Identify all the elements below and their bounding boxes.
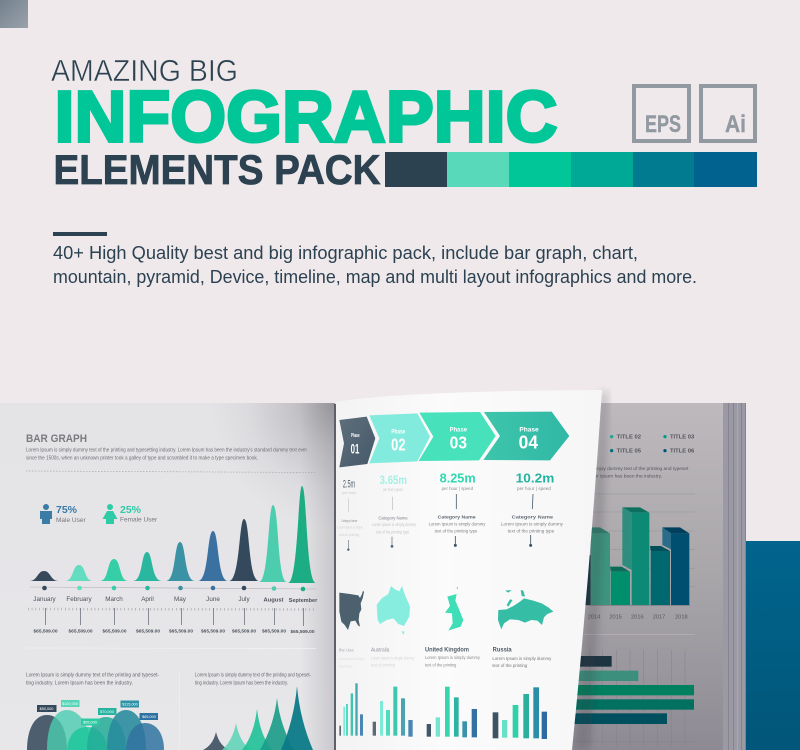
bar chart group 2 (373, 687, 413, 737)
value labels: $65,509.00 (68, 628, 93, 634)
phase arrow 02 (369, 413, 430, 463)
stat column 01: text of printing (339, 533, 359, 537)
country labels: Lorem Ipsum is simply (339, 656, 364, 661)
stat column 02: Lorem Ipsum is simply dummy (372, 522, 417, 527)
icon: Ai file badge (701, 86, 755, 141)
stat column 03: Category Name (438, 514, 476, 520)
month labels: January (33, 596, 57, 603)
map: Australia (377, 586, 410, 635)
phase arrow 03: 03 (450, 432, 467, 452)
dome tags: $115,000 (122, 702, 138, 706)
country labels: Australia (371, 647, 390, 653)
icon: EPS file badge (634, 86, 689, 141)
country labels: text of the printing (425, 662, 457, 667)
phase arrow 03: Phase (450, 427, 467, 434)
colour swatch strip (385, 152, 757, 187)
page shadow (574, 392, 608, 750)
stat: female user: Female User (120, 516, 158, 524)
book mockup (0, 390, 746, 750)
corner square (0, 0, 28, 28)
chart year labels: 2015 (609, 614, 622, 620)
chart: overlapping domes (27, 700, 164, 750)
3D bar chart (580, 507, 690, 605)
intro text (26, 448, 307, 462)
chart: peaks (203, 686, 313, 750)
accent rule (53, 232, 107, 236)
chart year labels: 2018 (675, 614, 688, 620)
phase arrow 01 (339, 417, 375, 467)
value labels: $65,509.00 (201, 628, 225, 634)
value labels: $65,509.00 (102, 628, 127, 634)
value drop lines (46, 608, 304, 626)
stat column 03: per hour | speed (442, 486, 474, 491)
stat column 04: Lorem Ipsum is simply dummy (501, 522, 564, 527)
right page text: enjoy dummy text of the printing and typeset (594, 466, 689, 471)
icon: female (102, 504, 118, 524)
dome tags: $70,000 (100, 710, 114, 714)
stat column 04: Category Name (512, 514, 553, 520)
stat column 04: per hour | speed (517, 486, 552, 491)
country labels: Lorem Ipsum is simply dummy (425, 655, 481, 660)
right page text: or Ipsum has been the industry. (594, 474, 662, 479)
value labels: $65,509.00 (262, 628, 286, 634)
icon: EPS file badge: EPS (645, 111, 681, 138)
title: infographic: INFOGRAPHIC (54, 78, 558, 158)
stat column 01 (337, 478, 363, 551)
stat: male user (40, 504, 86, 524)
phase arrow 04 (483, 412, 569, 460)
dome tags: $100,000 (62, 702, 78, 706)
month labels: April (141, 596, 154, 603)
bar chart group 4 (493, 687, 547, 739)
legend (610, 435, 695, 455)
page stack edge (723, 403, 746, 750)
value labels: $65,509.00 (169, 628, 193, 634)
title: amazing big: AMAZING BIG (51, 54, 238, 88)
timeline dots (42, 586, 305, 591)
bottom text blocks: Lorem Ipsum is simply dummy text of the printing and typeset- (26, 672, 159, 678)
icon: male (40, 504, 52, 524)
heading: bar graph: BAR GRAPH (26, 433, 87, 445)
month labels: August (264, 598, 284, 604)
stat: female user: 25% (120, 504, 142, 516)
value labels: $65,509.00 (232, 628, 256, 634)
stat column 01: 2.5m (343, 478, 355, 490)
country labels: Russia (493, 646, 512, 653)
stat column 02: Category Name (378, 515, 408, 520)
month labels: February (66, 596, 92, 603)
value labels (33, 628, 315, 635)
bottom text blocks: Lorem Ipsum is simply dummy text of the printing and typeset- (195, 672, 311, 678)
title: elements pack: ELEMENTS PACK (54, 146, 380, 193)
bottom text blocks (26, 672, 311, 686)
stat column 03: Lorem Ipsum is simply dummy (429, 522, 486, 527)
month labels: March (105, 596, 123, 603)
stat column 02: per hour | speed (383, 487, 403, 492)
phase arrow 01: Phase (351, 433, 360, 439)
map: United Kingdom (445, 587, 463, 631)
stat column 01: Lorem Ipsum is simply (337, 525, 363, 529)
icon: Ai file badge: Ai (725, 111, 746, 138)
country labels: United Kingdom (425, 646, 469, 653)
month labels: September (289, 598, 318, 604)
stat column 03: 8.25m (440, 472, 476, 486)
map: USA (339, 591, 364, 630)
bottom text blocks: ting industry. Lorem Ipsum has been the industry. (26, 680, 133, 686)
chart year labels: 2017 (653, 614, 665, 620)
bottom text blocks: ting industry. Lorem Ipsum has been the industry. (195, 680, 288, 686)
country labels: text of the printing (492, 663, 528, 668)
stat column 03: text of the printing type (435, 529, 478, 534)
bar chart group 1 (339, 683, 363, 736)
legend: TITLE 03 (670, 435, 695, 441)
intro text: since the 1500s, when an unknown printer took a galley of type and scrambled it to make a type specimen book. (26, 456, 258, 462)
panel: centre curled page (336, 390, 602, 750)
legend: TITLE 06 (670, 449, 695, 455)
stat column 02 (372, 473, 417, 548)
panel: right page with 3D bar chart (553, 403, 746, 750)
stat: male user: 75% (56, 504, 78, 516)
description text: mountain, pyramid, Device, timeline, map and multi layout infographics and more. (53, 267, 697, 287)
right page text (594, 466, 689, 479)
chart: bell curves (29, 486, 316, 583)
stat: female user (102, 504, 158, 524)
phase arrow 02: 02 (391, 434, 405, 454)
month labels (33, 596, 318, 604)
month labels: May (174, 596, 187, 603)
legend: TITLE 05 (617, 449, 642, 455)
value labels: $65,509.00 (136, 628, 160, 634)
stat column 02: 3.65m (380, 473, 407, 487)
dome tags: $50,000 (40, 707, 53, 711)
stat column 04 (501, 471, 564, 547)
legend: TITLE 02 (617, 435, 642, 441)
chart year labels (588, 614, 688, 620)
stat column 02: text of the printing type (376, 529, 410, 534)
stat column 01: Category Name (341, 518, 358, 523)
country labels: text of printing (371, 663, 396, 668)
country labels: dummy (339, 663, 352, 668)
intro text: Lorem Ipsum is simply dummy text of the printing and typesetting industry. Lorem Ipsum has been the industry's standard dummy text ever (26, 448, 307, 454)
country labels: Lorem Ipsum is simply dummy (492, 656, 552, 661)
blue block behind book (746, 541, 800, 750)
stat column 01: per hour (342, 491, 357, 495)
chart year labels: 2016 (631, 614, 644, 620)
dome tags: $65,000 (142, 715, 156, 719)
stat column 04: 10.2m (516, 471, 554, 486)
grid (570, 650, 695, 747)
phase arrow 01: 01 (351, 440, 359, 456)
value labels: $65,509.00 (33, 628, 58, 634)
description text (53, 243, 697, 287)
panel: left page bar graph (0, 403, 336, 750)
stat column 04: text of the printing type (508, 529, 555, 534)
phase arrow 02: Phase (391, 430, 406, 436)
month labels: July (238, 596, 250, 603)
horizontal bar chart (553, 656, 694, 724)
country labels (339, 646, 552, 668)
month labels: June (206, 596, 220, 603)
stat: male user: Male User (56, 517, 86, 524)
phase arrow 04: 04 (519, 431, 539, 452)
dome tags (37, 700, 158, 726)
bar chart group 3 (427, 687, 477, 737)
dome tags: $55,000 (83, 720, 97, 724)
description text: 40+ High Quality best and big infographic pack, include bar graph, chart, (53, 243, 638, 263)
value labels: $65,509.00 (290, 629, 315, 635)
phase arrow 04: Phase (519, 426, 539, 433)
map: Russia (498, 590, 553, 629)
country labels: Lorem Ipsum is simply dummy (371, 655, 415, 660)
stat column 03 (429, 472, 486, 547)
chart year labels: 2014 (588, 614, 600, 620)
country labels: the Usa (339, 648, 354, 654)
phase arrow 03 (419, 412, 496, 461)
